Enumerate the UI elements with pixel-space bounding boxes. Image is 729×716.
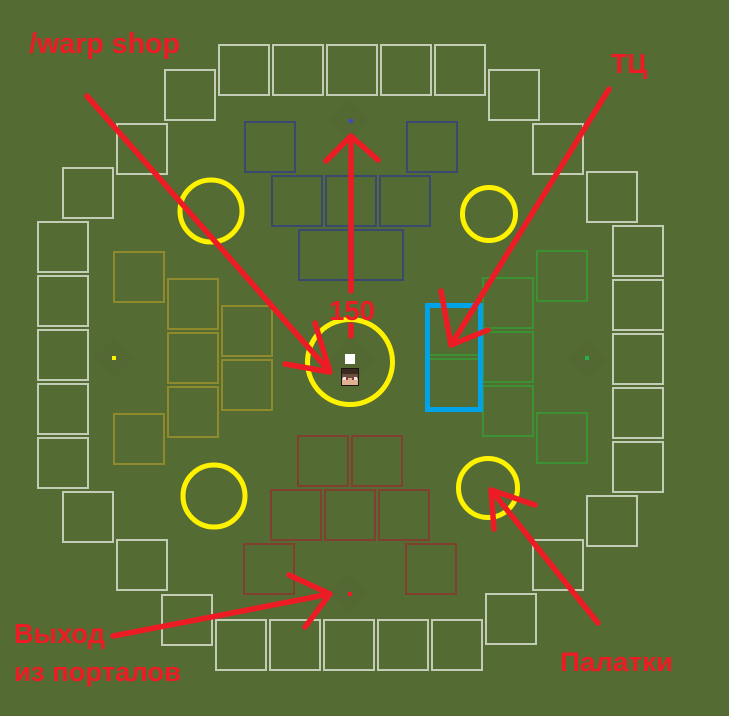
label: from portals: из порталов	[14, 657, 181, 687]
red plots	[244, 436, 456, 594]
spawn marker	[345, 354, 355, 364]
arrow: portal exit	[113, 575, 330, 636]
blue plots	[245, 122, 457, 280]
outer ring of white plots	[38, 45, 663, 670]
portal pads	[94, 100, 607, 614]
label: warp shop: /warp shop	[29, 28, 180, 60]
arrow: TC	[441, 89, 609, 345]
blue highlight: mall	[428, 306, 480, 410]
portal markers	[112, 119, 589, 596]
player head icon	[341, 368, 359, 386]
label: TC: ТЦ	[611, 48, 648, 79]
arrow: warp shop	[87, 96, 330, 372]
arrow: 150 radius up	[326, 136, 378, 336]
label: 150: 150	[329, 295, 375, 326]
green plots	[429, 251, 587, 463]
label: tents: Палатки	[560, 647, 673, 677]
arrow: tents	[491, 490, 598, 623]
label: portal exit: Выход	[14, 618, 105, 649]
yellow plots	[114, 252, 272, 464]
yellow circles: tents	[180, 180, 518, 527]
